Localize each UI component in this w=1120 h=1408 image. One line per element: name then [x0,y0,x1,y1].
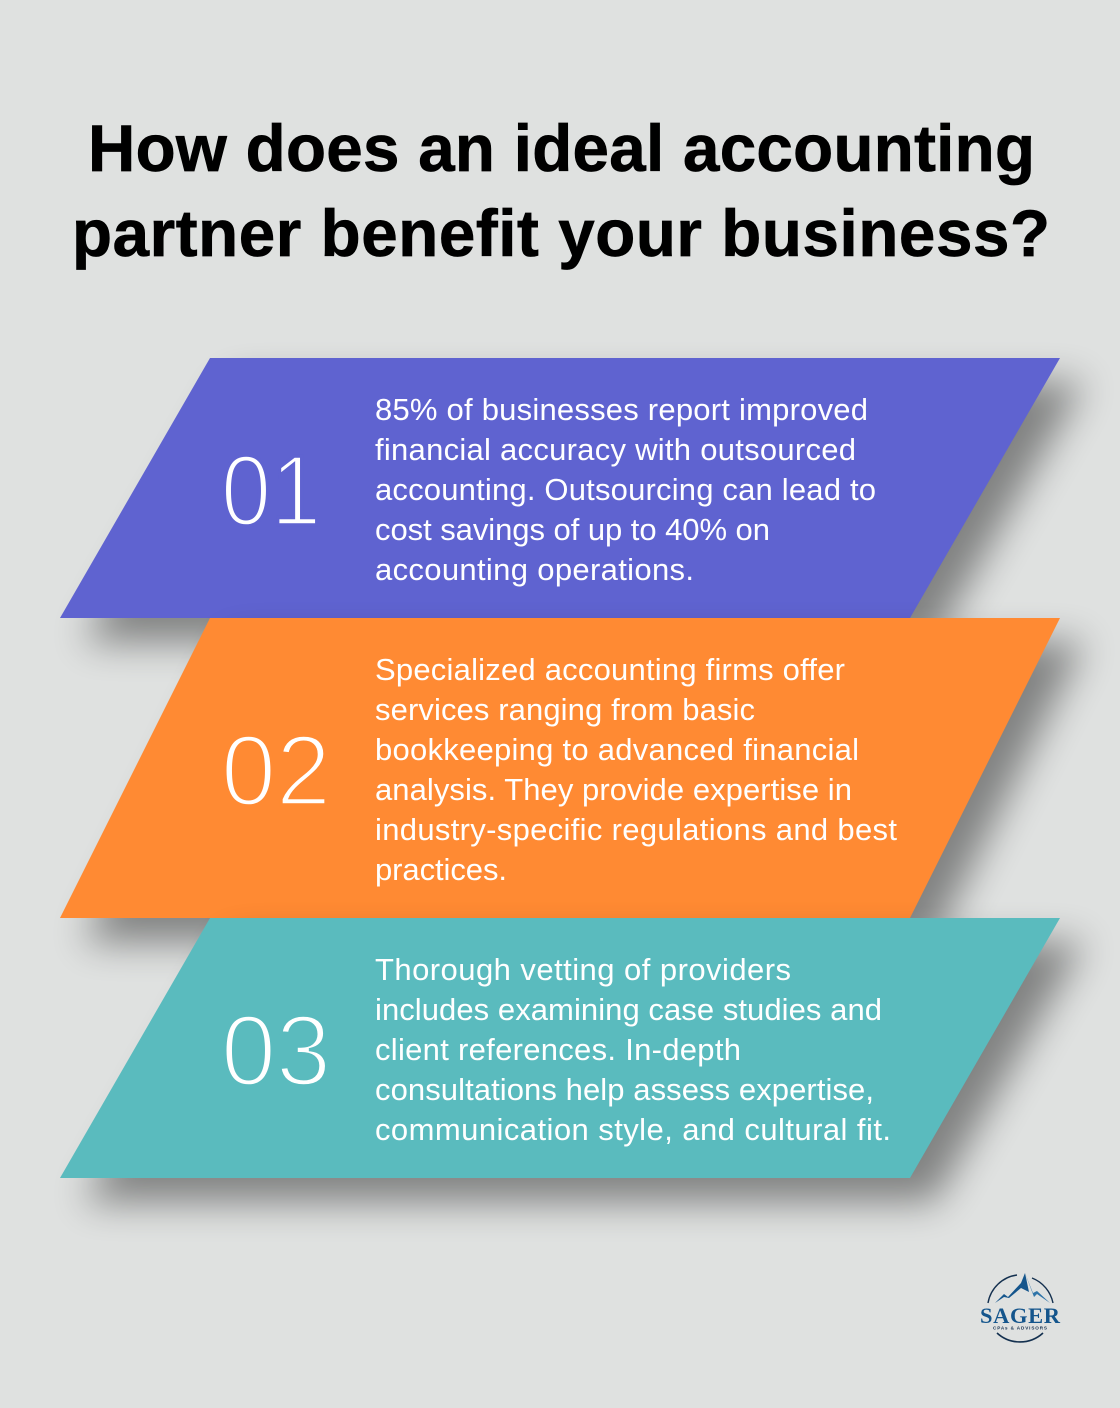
text: step 02: analysis. They provide expertise in [375,772,852,807]
number: 01: 01 [221,435,321,547]
text: step 03: Thorough vetting of providers [375,952,791,987]
text: step 02 [375,652,897,887]
text: step 02: Specialized accounting firms offer [375,652,845,687]
text: step 03 [375,952,891,1147]
logo: Sager CPAs & Advisors [980,1273,1061,1342]
text: step 02: services ranging from basic [375,692,755,727]
panel: step 02 [60,618,1084,942]
text: step 01: financial accuracy with outsourced [375,432,856,467]
text: step 01: accounting. Outsourcing can lead to [375,472,876,507]
text: step 03: includes examining case studies and [375,992,882,1027]
title: partner benefit your business? [72,197,1050,270]
logo: Sager CPAs & Advisors: CPAs & ADVISORS [993,1326,1047,1330]
number: 02: 02 [221,715,331,827]
text: step 03: client references. In-depth [375,1032,741,1067]
text: step 02: practices. [375,852,507,887]
title: How does an ideal accounting [88,112,1035,185]
text: step 01 [375,392,876,587]
text: step 01: cost savings of up to 40% on [375,512,770,547]
text: step 01: 85% of businesses report improved [375,392,868,427]
text: step 01: accounting operations. [375,552,694,587]
panel shape: step 03 [60,918,1060,1178]
panel: step 03 [60,918,1084,1202]
text: step 02: industry-specific regulations and best [375,812,897,847]
panel shape: step 01 [60,358,1060,618]
logo: Sager CPAs & Advisors: SAGER [980,1303,1061,1328]
title [72,112,1050,270]
number: 03: 03 [221,995,331,1107]
panel shape: step 02 [60,618,1060,918]
text: step 03: consultations help assess expertise, [375,1072,874,1107]
text: step 03: communication style, and cultural fit. [375,1112,891,1147]
panel: step 01 [60,358,1084,642]
text: step 02: bookkeeping to advanced financial [375,732,859,767]
